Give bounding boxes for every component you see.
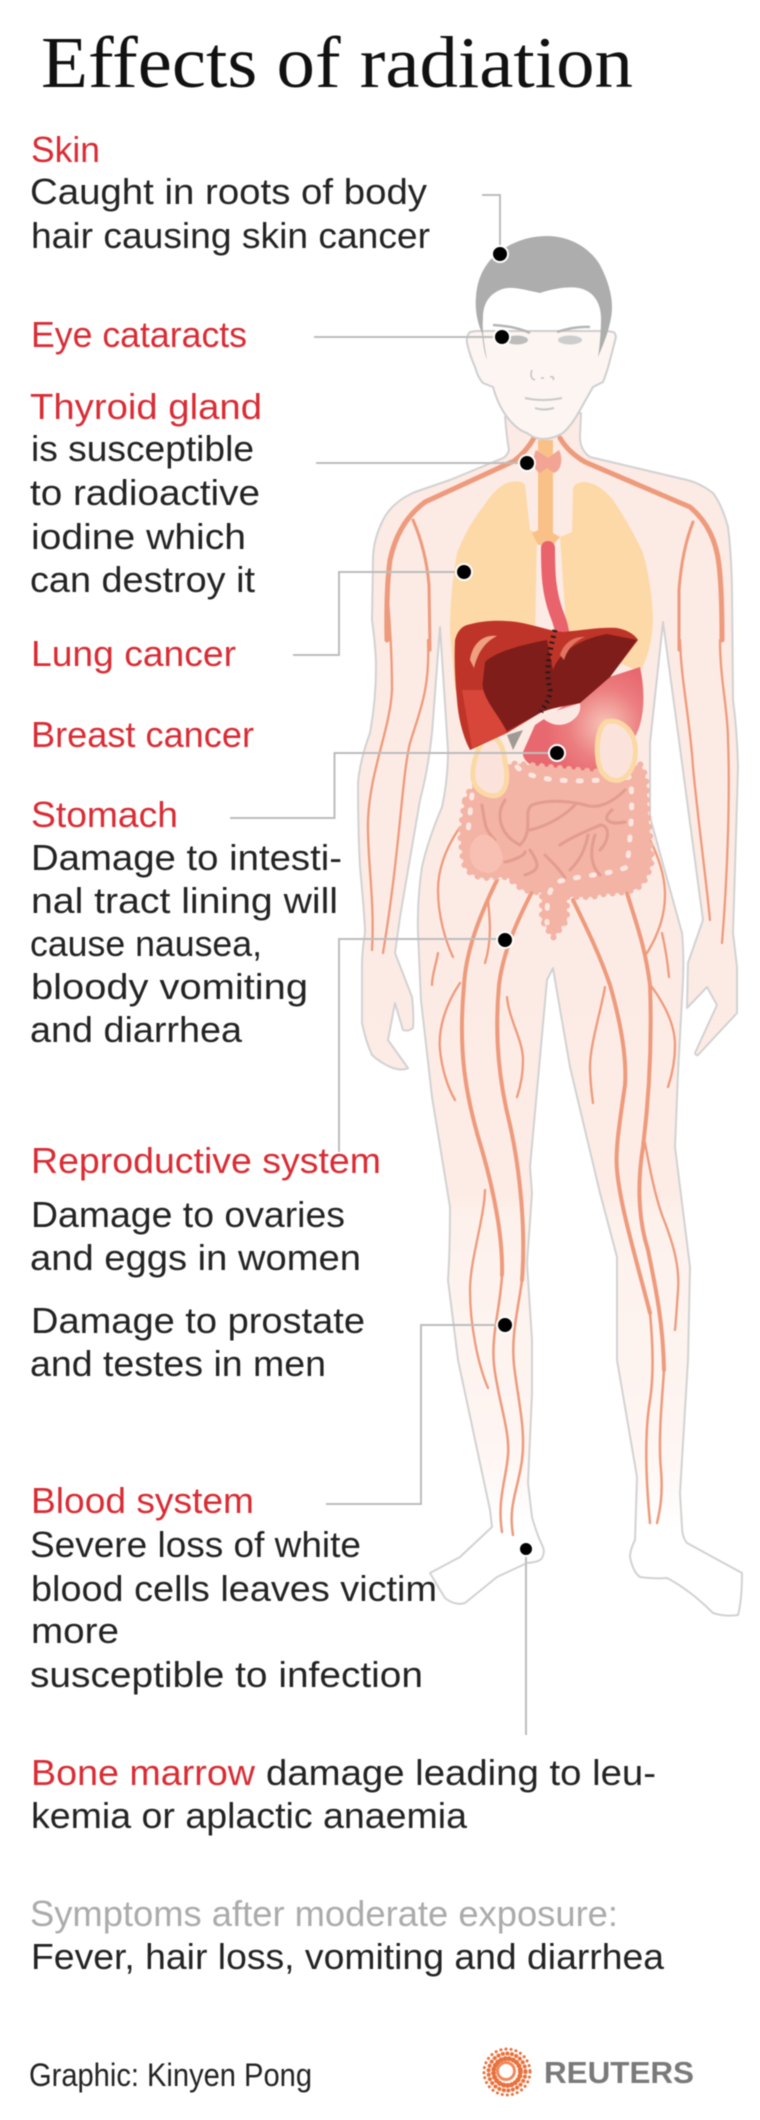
opening under the liver xyxy=(540,703,580,725)
nose xyxy=(531,370,554,380)
reuters logo xyxy=(484,2049,694,2095)
credit: Graphic: Kinyen Pong xyxy=(29,2057,312,2093)
text block: blood system: susceptible to infection xyxy=(30,1654,423,1695)
text block: reproductive system: and eggs in women xyxy=(30,1237,361,1278)
text block: stomach: cause nausea, xyxy=(30,923,262,964)
text block: blood system: blood cells leaves victim xyxy=(31,1568,437,1609)
intestines xyxy=(460,764,652,938)
text block: stomach: Stomach xyxy=(31,794,178,835)
left eyebrow xyxy=(493,325,530,333)
mouth xyxy=(525,398,562,410)
text block: stomach: and diarrhea xyxy=(30,1009,243,1050)
right eyebrow xyxy=(557,327,590,332)
stomach xyxy=(523,667,643,776)
text block: stomach xyxy=(30,794,342,1050)
text block: blood system: Blood system xyxy=(31,1480,254,1521)
text block: skin: Skin xyxy=(31,129,100,170)
right eye xyxy=(558,336,582,344)
text block: blood system xyxy=(30,1480,437,1695)
text block: thyroid gland: to radioactive xyxy=(30,472,260,513)
wordmark: REUTERS xyxy=(544,2055,694,2090)
label: eye cataracts: Eye cataracts xyxy=(31,314,247,355)
text block: skin: hair causing skin cancer xyxy=(31,215,430,256)
text block: bone marrow xyxy=(31,1752,656,1836)
text block: stomach: bloody vomiting xyxy=(31,966,308,1007)
gall bladder xyxy=(507,730,523,750)
text block: reproductive system: and testes in men xyxy=(30,1343,326,1384)
text block: thyroid gland: iodine which xyxy=(31,516,246,557)
text block: skin xyxy=(30,129,430,256)
liver xyxy=(455,621,638,750)
text block: thyroid gland xyxy=(30,386,262,600)
left eye xyxy=(506,336,528,344)
text block: bone marrow: damage leading to leu- xyxy=(266,1752,656,1793)
kidney left xyxy=(473,737,507,796)
text block: thyroid gland: Thyroid gland xyxy=(30,386,262,427)
label: lung cancer: Lung cancer xyxy=(31,633,236,674)
text block: symptoms: Fever, hair loss, vomiting and diarrhea xyxy=(31,1936,665,1977)
text block: symptoms: Symptoms after moderate exposure: xyxy=(30,1893,618,1934)
kidney right xyxy=(597,721,635,780)
text block: stomach: nal tract lining will xyxy=(31,880,338,921)
icon: reuters dots xyxy=(484,2049,530,2095)
leader lines xyxy=(230,195,557,1735)
text block: bone marrow: Bone marrow xyxy=(31,1752,256,1793)
text block: reproductive system: Damage to ovaries xyxy=(31,1194,345,1235)
lungs xyxy=(450,481,653,690)
head xyxy=(467,236,616,439)
marker dots xyxy=(456,246,565,1556)
trachea xyxy=(532,440,560,545)
thyroid gland xyxy=(534,450,561,473)
title: Effects of radiation xyxy=(41,22,633,103)
arteries xyxy=(368,438,729,1535)
body silhouette xyxy=(358,413,742,1616)
text block: stomach: Damage to intesti- xyxy=(31,837,342,878)
text block: symptoms xyxy=(30,1893,665,1977)
text block: thyroid gland: can destroy it xyxy=(30,559,255,600)
hair xyxy=(476,236,612,360)
text block: bone marrow: kemia or aplactic anaemia xyxy=(31,1795,468,1836)
esophagus xyxy=(548,548,563,640)
label: breast cancer: Breast cancer xyxy=(31,714,254,755)
text block: skin: Caught in roots of body xyxy=(30,171,427,212)
text block: blood system: more xyxy=(31,1610,119,1651)
face xyxy=(467,331,616,439)
text block: thyroid gland: is susceptible xyxy=(31,428,254,469)
text block: reproductive system: Reproductive system xyxy=(31,1140,381,1181)
text block: reproductive system: Damage to prostate xyxy=(31,1300,365,1341)
text block: reproductive system xyxy=(30,1140,381,1384)
human body figure xyxy=(358,236,742,1616)
text block: blood system: Severe loss of white xyxy=(30,1524,361,1565)
